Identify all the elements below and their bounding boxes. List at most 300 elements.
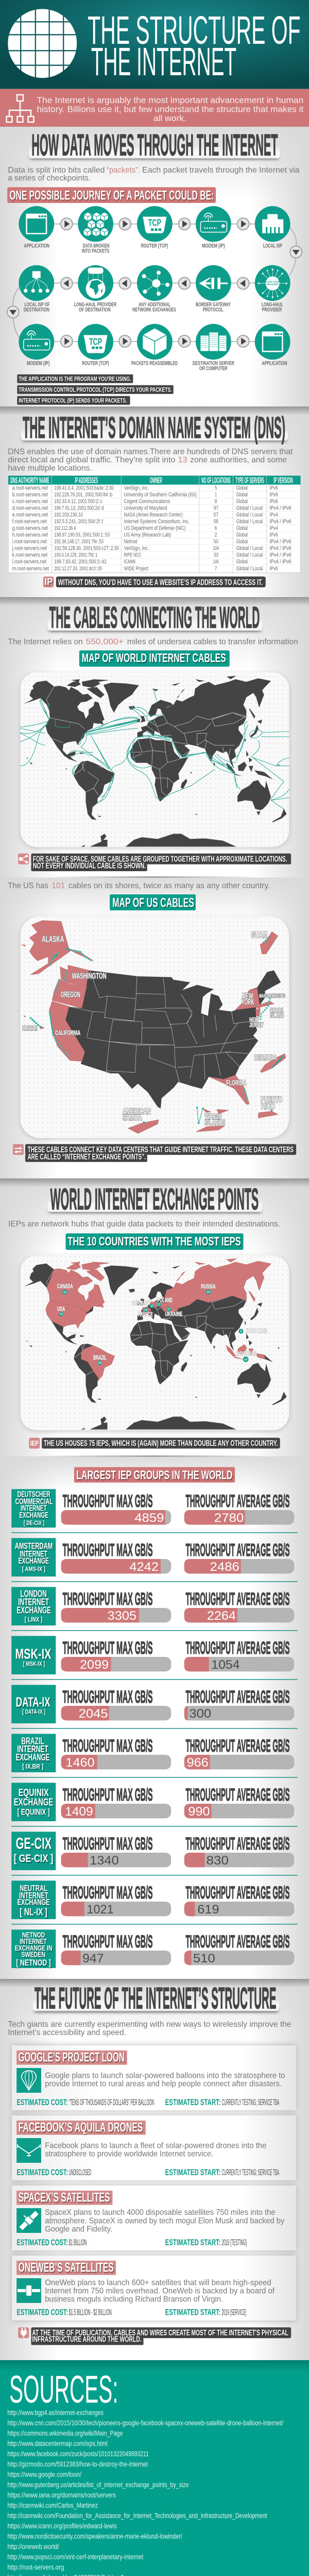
card: google loon: “TENS OF THOUSANDS OF DOLLARS” PER BALLOON: [69, 2097, 154, 2107]
row: nl-ix: [11, 1880, 298, 1925]
table rows: Cogent Communications: [124, 498, 170, 504]
table header: OWNER: [150, 476, 162, 485]
map: countries with most ieps: [20, 1256, 289, 1431]
table rows: a.root-servers.net: [12, 484, 48, 491]
table rows: i.root-servers.net: [12, 538, 47, 545]
country labels: [57, 1283, 267, 1361]
sources list: http://www.datacentermap.com/ixps.html: [8, 2440, 108, 2448]
node: long-haul provider of destination: LONG HAUL: [88, 275, 103, 277]
table rows: IPv6: [269, 565, 278, 572]
row: msk-ix: [ MSK-IX ]: [23, 1660, 45, 1667]
table rows: VeriSign, Inc.: [124, 484, 149, 491]
notes: protocol definitions: THE APPLICATION IS THE PROGRAM YOU'RE USING.: [19, 376, 131, 382]
subheading: us cable map: MAP OF US CABLES: [112, 895, 194, 910]
table rows: 7: [215, 565, 217, 572]
notes: protocol definitions: TRANSMISSION CONTROL PROTOCOL (TCP) DIRECTS YOUR PACKETS.: [19, 386, 172, 393]
table rows: Netnod: [124, 538, 137, 545]
table rows: VeriSign, Inc.: [124, 545, 149, 551]
dns text: have multiple locations.: [8, 464, 92, 472]
card: oneweb satellites: [12, 2255, 296, 2321]
table rows: Global / Local: [236, 565, 263, 572]
table rows: Global: [236, 524, 248, 531]
table rows: 104: [213, 545, 219, 551]
note: us houses 75 ieps: IEP: [30, 1439, 39, 1448]
node: application (destination): [255, 324, 290, 366]
row: msk-ix: 1054: [211, 1657, 240, 1672]
country labels: INDONESIA: [236, 1350, 257, 1357]
section: exchange points: [8, 1182, 298, 1968]
intro text: [8, 166, 300, 182]
row: netnod: 510: [193, 1951, 215, 1965]
state labels: GUAM: [251, 930, 267, 940]
table rows: 192.112.36.4: [54, 524, 76, 531]
node: border gateway protocol: PROTOCOL: [203, 307, 224, 313]
sources list: https://www.icann.org/profiles/edward-lewis: [8, 2522, 117, 2530]
table rows: Internet Systems Consortium, Inc.: [124, 518, 190, 524]
state labels: NEW: [249, 1016, 259, 1023]
node: packets reassembled: [131, 324, 178, 366]
node: router tcp (destination): ROUTER (TCP): [82, 361, 109, 366]
card: spacex satellites: ESTIMATED START:: [165, 2238, 221, 2247]
table rows: Global: [236, 531, 248, 538]
table rows: NASA (Ames Research Center): [124, 511, 183, 518]
row: ix.br: THROUGHPUT MAX GB/S: [63, 1736, 153, 1755]
card: oneweb satellites: ESTIMATED START:: [165, 2307, 221, 2317]
node: border gateway protocol: [196, 265, 231, 313]
row: msk-ix: 2099: [80, 1657, 109, 1672]
table rows: IPv4 / IPv6: [269, 551, 291, 558]
table rows: 193.0.14.129, 2001:7fd::1: [54, 551, 97, 558]
sources list: http://gizmodo.com/5912383/how-to-destroy-the-internet: [8, 2461, 148, 2468]
card: oneweb satellites: Internet from 750 miles overhead. OneWeb is backed by a board of: [45, 2287, 274, 2295]
node: application: [19, 206, 54, 249]
node: application: APPLICATION: [24, 243, 49, 249]
intro text: Data is split into bits called: [8, 166, 105, 175]
arrows: flow direction: [7, 218, 302, 347]
table rows: IPv4 / IPv6: [269, 558, 291, 565]
intro text: a series of checkpoints.: [8, 174, 91, 182]
country counts: 17: [150, 1305, 153, 1308]
state labels: [22, 930, 285, 1127]
table rows: [12, 484, 291, 572]
sources list: http://oneweb.world/: [8, 2543, 59, 2551]
country counts: 30: [98, 1362, 101, 1365]
node: router tcp: ROUTER (TCP): [141, 243, 168, 249]
table header: DNS AUTHORITY NAME: [10, 476, 49, 485]
header banner: [0, 0, 309, 89]
node: data broken into packets: INTO PACKETS: [82, 248, 110, 254]
dns text: direct local and global traffic. They’re split into: [8, 456, 176, 464]
node: router tcp (destination): TCP: [89, 337, 102, 347]
cables text: [8, 638, 298, 646]
node: packets reassembled: PACKETS REASSEMBLED: [131, 361, 178, 366]
card: oneweb satellites: ESTIMATED COST:: [17, 2307, 68, 2317]
row: linx: [ LINX ]: [25, 1616, 42, 1623]
row: ix.br: [ IX.BR ]: [22, 1763, 43, 1771]
icon: satellite: [16, 2208, 41, 2233]
country counts: 17: [167, 1308, 170, 1311]
table rows: 5: [215, 484, 217, 491]
table rows: Global: [236, 558, 248, 565]
sources list: http://www.nordicitsecurity.com/speakers/anne-marie-eklund-lowinder/: [8, 2533, 183, 2540]
footer: sources: SOURCES:: [9, 2368, 118, 2411]
row: nl-ix: THROUGHPUT MAX GB/S: [63, 1883, 153, 1902]
table rows: 199.7.83.42, 2001:500:3::42: [54, 558, 107, 565]
table rows: 33: [214, 551, 218, 558]
state labels: HAWAII: [22, 1025, 38, 1032]
card: facebook aquila: [12, 2115, 296, 2181]
row: linx: 3305: [108, 1608, 136, 1623]
card: facebook aquila: ESTIMATED COST:: [17, 2167, 68, 2177]
card: google loon: ESTIMATED START:: [165, 2097, 221, 2107]
cables text: 550,000+: [85, 638, 124, 646]
section: future: [8, 1981, 296, 2345]
row: ams-ix: 2486: [210, 1560, 239, 1574]
table rows: ICANN: [124, 558, 135, 565]
table rows: Global / Local: [236, 511, 263, 518]
row: linx: [11, 1587, 298, 1631]
table rows: IPv6: [269, 531, 278, 538]
icon: oneweb satellite: [16, 2278, 41, 2303]
row: ams-ix: AMSTERDAM: [15, 1541, 53, 1551]
us cables text: cables on its shores, twice as many as any other country.: [68, 882, 270, 890]
sources list: [8, 2409, 298, 2576]
card: oneweb satellites: 2019 (SERVICE): [221, 2307, 246, 2317]
row: ix.br: [11, 1734, 298, 1778]
country counts: 23: [244, 1359, 247, 1361]
row: nl-ix: [ NL-IX ]: [20, 1907, 47, 1918]
table rows: IPv4: [269, 524, 278, 531]
card: spacex satellites: SPACEX’S SATELLITES: [19, 2190, 110, 2205]
node: long-haul provider: PROVIDER: [267, 283, 279, 286]
cable nodes: [30, 937, 282, 1104]
table rows: 192.5.5.241, 2001:500:2f::f: [54, 518, 104, 524]
node: destination server: [193, 324, 234, 371]
node: long-haul provider: PROVIDER: [262, 307, 282, 313]
flow connectors: [13, 224, 296, 342]
table rows: c.root-servers.net: [12, 498, 48, 504]
table rows: j.root-servers.net: [12, 545, 47, 551]
table rows: Global: [236, 484, 248, 491]
state labels: VIRGIN: [204, 1113, 221, 1121]
table rows: m.root-servers.net: [12, 565, 49, 572]
node: border gateway protocol: BORDER GATEWAY: [196, 302, 231, 308]
note: data centers: [13, 1144, 296, 1162]
mainland us: [65, 970, 281, 1109]
table rows: IPv4 / IPv6: [269, 518, 291, 524]
highlighted countries: [46, 1259, 271, 1381]
card: google loon: ESTIMATED COST:: [17, 2097, 68, 2107]
row: de-cix: [ DE-CIX ]: [24, 1519, 44, 1527]
table rows: Global / Local: [236, 551, 263, 558]
state labels: MASSACHUSETTS: [259, 994, 285, 999]
row: equinix: 1409: [65, 1804, 93, 1819]
row: ams-ix: [11, 1538, 298, 1582]
row: data-ix: 300: [189, 1706, 211, 1721]
table rows: 2: [215, 531, 217, 538]
highlighted states: [22, 921, 286, 1104]
node: local isp: [255, 206, 290, 249]
section: dns: [8, 411, 301, 587]
table rows: US Department of Defense (NIC): [124, 524, 185, 531]
row: netnod: INTERNET: [20, 1938, 47, 1946]
row: netnod: [ NETNOD ]: [16, 1958, 51, 1968]
row: ams-ix: EXCHANGE: [19, 1556, 49, 1566]
table rows: IPv6: [269, 491, 278, 498]
icon: balloon: [16, 2068, 41, 2093]
node: modem ip (destination): [19, 324, 54, 366]
table rows: US Army (Research Lab): [124, 531, 171, 538]
country counts: 26: [207, 1291, 210, 1294]
country labels: FRANCE: [138, 1311, 153, 1318]
row: data-ix: [11, 1685, 298, 1729]
node: long-haul provider of destination: PROVIDER: [90, 277, 102, 279]
table rows: University of Maryland: [124, 504, 167, 511]
card: oneweb satellites: $1.5 BILLION - $2 BILLION: [69, 2307, 112, 2317]
us cables text: [8, 882, 270, 890]
node: network exchanges: NETWORK EXCHANGES: [132, 307, 176, 313]
table rows: Global / Local: [236, 504, 263, 511]
intro text: “packets”.: [107, 166, 140, 175]
note: ip address: [43, 577, 266, 587]
node: router tcp: [137, 206, 173, 249]
dns text: zone authorities, and some: [190, 456, 287, 464]
node: data broken into packets: [78, 206, 113, 254]
sources list: https://www.facebook.com/zuck/posts/10101322049893211: [8, 2450, 149, 2458]
sources list: http://www.gutenberg.us/articles/list_of_internet_exchange_points_by_size: [8, 2481, 189, 2489]
country counts: 75: [59, 1313, 63, 1316]
cables overlay: [20, 690, 289, 810]
table rows: 199.7.91.13, 2001:500:2d::d: [54, 504, 104, 511]
state labels: ISLANDS: [204, 1118, 225, 1127]
row: de-cix: INTERNET: [21, 1504, 47, 1513]
row: ge-cix: THROUGHPUT MAX GB/S: [63, 1834, 153, 1853]
cables text: The Internet relies on: [8, 638, 83, 646]
note: grouped cables: NOT EVERY INDIVIDUAL CABLE IS SHOWN.: [33, 861, 146, 870]
table rows: 97: [214, 504, 218, 511]
future text: [8, 2020, 291, 2037]
row: data-ix: THROUGHPUT MAX GB/S: [63, 1687, 153, 1706]
row: ams-ix: INTERNET: [20, 1549, 47, 1558]
node: long-haul provider of destination: LONG-HAUL PROVIDER: [74, 302, 117, 308]
sources list: http://icannwiki.com/Carlos_Martinez: [8, 2502, 98, 2510]
node: router tcp: TCP: [148, 218, 161, 228]
subheading: world cable map: [79, 650, 230, 667]
table rows: 192.228.79.201, 2001:500:84::b: [54, 491, 112, 498]
table rows: 144: [213, 558, 219, 565]
node: application (destination): APPLICATION: [262, 361, 287, 366]
row: ix.br: 1460: [65, 1755, 95, 1770]
state labels: ALASKA: [42, 935, 64, 944]
node: destination server: DESTINATION SERVER: [193, 361, 234, 366]
table rows: IPv4 / IPv6: [269, 538, 291, 545]
row: netnod: [11, 1929, 294, 1968]
row: equinix: THROUGHPUT MAX GB/S: [63, 1785, 153, 1804]
map: world internet cables: [20, 672, 289, 849]
table rows: IPv4 / IPv6: [269, 504, 291, 511]
state labels: WASHINGTON: [72, 972, 107, 980]
intro text: all work.: [153, 113, 186, 123]
row: linx: THROUGHPUT MAX GB/S: [63, 1589, 153, 1608]
row: ams-ix: THROUGHPUT MAX GB/S: [63, 1540, 153, 1560]
subheading: largest iep groups: [74, 1467, 235, 1483]
table rows: 198.41.0.4, 2001:503:ba3e::2:30: [54, 484, 114, 491]
state labels: RICO: [261, 1101, 275, 1111]
sources list: https://commons.wikimedia.org/wiki/Main_Page: [8, 2430, 123, 2437]
state labels: BERMUDA: [254, 1054, 277, 1062]
row: linx: EXCHANGE: [17, 1605, 51, 1616]
future text: Internet’s accessibility and speed.: [8, 2028, 126, 2037]
footer: sources: [0, 2360, 309, 2576]
icon: drone: [16, 2138, 41, 2163]
row: netnod: EXCHANGE IN: [15, 1944, 52, 1953]
row: nl-ix: NEUTRAL: [20, 1884, 47, 1893]
subheading: journey: [7, 187, 216, 203]
table rows: Global: [236, 538, 248, 545]
card: facebook aquila: stratosphere to provide worldwide Internet service.: [45, 2149, 213, 2158]
card: google loon: GOOGLE’S PROJECT LOON: [19, 2050, 125, 2064]
table rows: 6: [215, 524, 217, 531]
row: ix.br: 966: [187, 1755, 209, 1770]
table rows: RIPE NCC: [124, 551, 142, 558]
state labels: PUERTO: [261, 1094, 282, 1104]
node: long-haul provider of destination: OF DESTINATION: [79, 307, 111, 313]
row: de-cix: EXCHANGE: [20, 1511, 48, 1520]
country counts: 9: [240, 1330, 242, 1333]
notes: protocol definitions: [17, 375, 174, 405]
node: local isp of destination: [19, 265, 54, 313]
row: data-ix: 2045: [79, 1706, 108, 1721]
row: de-cix: 4859: [134, 1511, 164, 1525]
row: ge-cix: 1340: [90, 1853, 119, 1868]
state labels: AMERICAN: [123, 1108, 151, 1116]
table rows: 192.33.4.12, 2001:500:2::c: [54, 498, 102, 504]
table rows: WIDE Project: [124, 565, 149, 572]
node: router tcp (destination): [78, 324, 113, 366]
row: netnod: 947: [82, 1951, 104, 1965]
subheading: top 10 countries: [65, 1233, 244, 1250]
note: cables and wires: INFRASTRUCTURE AROUND THE WORLD.: [32, 2334, 142, 2344]
sources list: https://www.iana.org/domains/root/servers: [8, 2492, 116, 2499]
state labels: JERSEY: [249, 1021, 264, 1028]
row: netnod: SWEDEN: [21, 1951, 45, 1959]
icon: globe grid: [8, 9, 77, 78]
row: ge-cix: [11, 1832, 298, 1876]
row: nl-ix: EXCHANGE: [18, 1897, 49, 1907]
node: modem ip (destination): MODEM (IP): [27, 361, 50, 366]
icon: hierarchy: [6, 95, 33, 122]
card: spacex satellites: [12, 2185, 296, 2251]
table header: NO OF LOCATIONS: [201, 476, 231, 485]
table rows: Global: [236, 498, 248, 504]
row: equinix: EQUINIX: [19, 1786, 49, 1799]
country labels: CANADA: [57, 1283, 73, 1290]
row: ix.br: BRAZIL: [21, 1736, 44, 1747]
table rows: 202.12.27.33, 2001:dc3::35: [54, 565, 102, 572]
node: local isp of destination: DESTINATION: [24, 307, 49, 313]
note: data centers: ARE CALLED “INTERNET EXCHANGE POINTS”.: [28, 1152, 146, 1161]
row: linx: INTERNET: [18, 1597, 49, 1607]
card: google loon: [12, 2045, 296, 2111]
section: cables: [8, 601, 298, 1162]
row: msk-ix: MSK-IX: [15, 1646, 52, 1662]
row: linx: 2264: [207, 1608, 236, 1623]
row: equinix: [11, 1783, 298, 1827]
card: spacex satellites: $1 BILLION: [69, 2238, 87, 2247]
row: ge-cix: GE-CIX: [16, 1834, 52, 1853]
table rows: 1: [215, 491, 217, 498]
row: equinix: 990: [188, 1804, 210, 1819]
node: modem ip: MODEM (IP): [202, 243, 225, 249]
table rows: b.root-servers.net: [12, 491, 48, 498]
table header: IP ADDRESSES: [75, 476, 98, 485]
row: de-cix: THROUGHPUT MAX GB/S: [63, 1491, 153, 1511]
table rows: 192.36.148.17, 2001:7fe::53: [54, 538, 104, 545]
country labels: RUSSIA: [201, 1283, 216, 1290]
us cables text: The US has: [8, 882, 48, 890]
table rows: Global: [236, 491, 248, 498]
card: spacex satellites: ESTIMATED COST:: [17, 2238, 68, 2247]
state labels: FLORIDA: [226, 1079, 246, 1087]
country counts: 17: [157, 1303, 161, 1307]
country counts: [59, 1290, 249, 1365]
row: nl-ix: INTERNET: [19, 1890, 48, 1900]
state labels: NEW: [242, 991, 253, 1001]
country labels: BRAZIL: [93, 1354, 107, 1361]
table rows: IPv6: [269, 484, 278, 491]
node: long-haul provider: LONG HAUL: [265, 281, 280, 284]
title: [88, 8, 301, 84]
table rows: 50: [214, 538, 218, 545]
table rows: IPv4: [269, 511, 278, 518]
row: linx: LONDON: [20, 1589, 47, 1599]
node: long-haul provider: LONG-HAUL: [262, 302, 283, 308]
row: ix.br: EXCHANGE: [16, 1752, 49, 1763]
row: data-ix: [ DATA-IX ]: [22, 1708, 45, 1715]
node: local isp of destination: LOCAL ISP OF: [24, 302, 49, 308]
state labels: RHODE: [270, 1007, 283, 1014]
node: destination server: OR COMPUTER: [199, 366, 228, 371]
dns text: 13: [178, 456, 187, 464]
note: cables and wires: [18, 2327, 291, 2345]
card: oneweb satellites: OneWeb plans to launch 600+ satellites that will beam high-speed: [45, 2278, 271, 2287]
iep text: IEPs are network hubs that guide data packets to their intended destinations.: [8, 1220, 280, 1228]
state labels: ISLAND: [270, 1012, 284, 1019]
row: equinix: EXCHANGE: [14, 1796, 53, 1808]
row: de-cix: 2780: [214, 1511, 244, 1525]
row: ams-ix: [ AMS-IX ]: [22, 1565, 45, 1572]
section: how data moves: [7, 129, 302, 405]
table rows: University of Southern California (ISI): [124, 491, 197, 498]
table rows: 192.203.230.10: [54, 511, 83, 518]
node: modem ip: [196, 206, 231, 249]
intro band: [0, 89, 309, 127]
row: de-cix: [11, 1489, 298, 1533]
row: netnod: NETNOD: [22, 1931, 45, 1939]
card: oneweb satellites: business moguls including Richard Branson of Virgin.: [45, 2295, 223, 2303]
table rows: Global / Local: [236, 545, 263, 551]
row: ge-cix: 830: [207, 1853, 229, 1868]
country labels: UKRAINE: [165, 1311, 182, 1317]
row: ge-cix: [ GE-CIX ]: [14, 1852, 53, 1865]
notes: protocol definitions: INTERNET PROTOCOL (IP) SENDS YOUR PACKETS.: [19, 397, 127, 404]
state labels: SAMOA: [123, 1113, 142, 1122]
row: equinix: [ EQUINIX ]: [18, 1807, 49, 1817]
territories: lower panel: [128, 1109, 278, 1133]
state labels: YORK: [242, 997, 254, 1007]
table header: [10, 476, 293, 485]
node: local isp: LOCAL ISP: [263, 243, 282, 249]
